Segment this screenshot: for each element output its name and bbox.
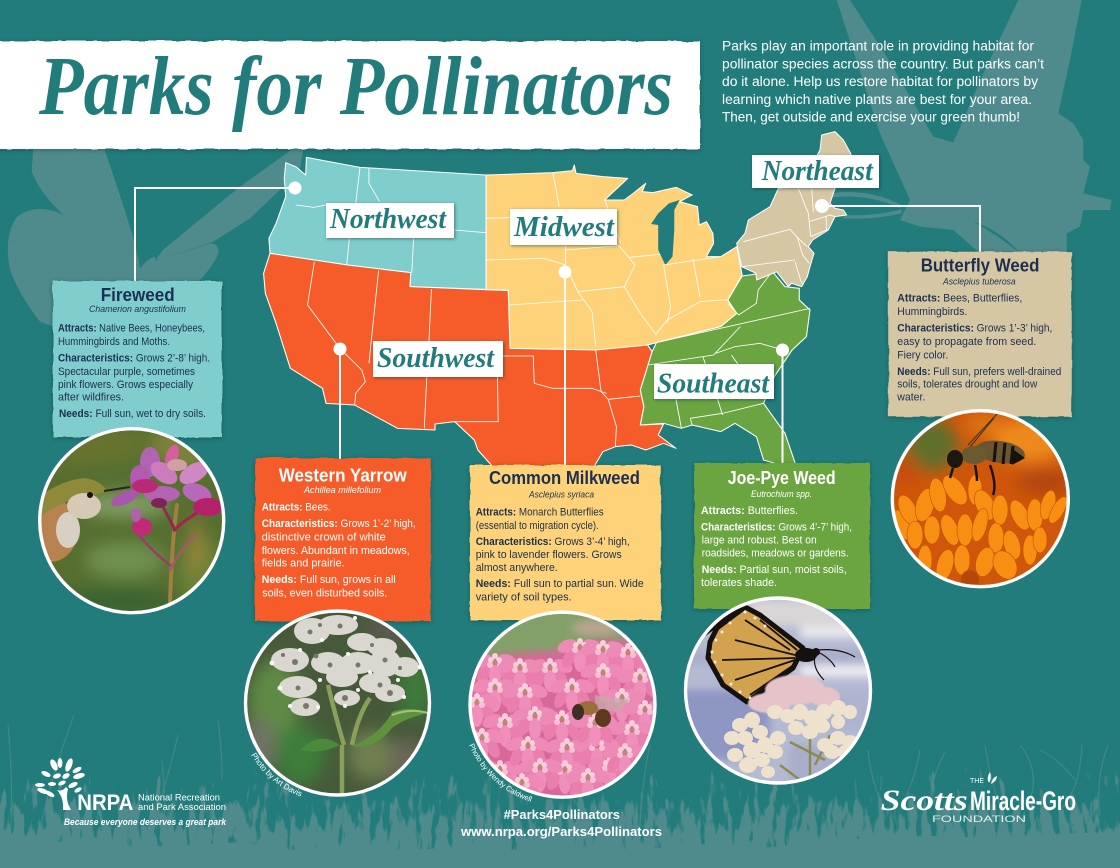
card: Fireweed: pink flowers. Grows especially bbox=[58, 379, 193, 391]
campaign hashtag and url bbox=[460, 807, 662, 839]
card: Fireweed: Attracts: Native Bees, Honeybees, bbox=[58, 323, 205, 335]
NRPA logo: National Recreation bbox=[138, 793, 220, 803]
card: Butterfly Weed: Butterfly Weed bbox=[921, 256, 1039, 276]
card: Common Milkweed: variety of soil types. bbox=[476, 592, 572, 604]
region: Southeast bbox=[640, 272, 810, 470]
campaign hashtag and url: #Parks4Pollinators bbox=[504, 807, 620, 822]
card: Western Yarrow: soils, even disturbed soils. bbox=[262, 588, 387, 600]
connector lines and map pins bbox=[135, 182, 980, 466]
map of the United States by region bbox=[264, 132, 852, 470]
card: Fireweed: Hummingbirds and Moths. bbox=[58, 336, 170, 348]
card: Joe-Pye Weed: Needs: Partial sun, moist soils, bbox=[702, 564, 847, 576]
intro text: learning which native plants are best for your area. bbox=[722, 92, 1032, 107]
card: Fireweed: after wildfires. bbox=[58, 392, 124, 404]
intro text: Parks play an important role in providing habitat for bbox=[722, 39, 1035, 54]
photo: hummingbird at fireweed bbox=[38, 427, 226, 614]
title banner: Parks for Pollinators bbox=[38, 40, 673, 133]
card: Joe-Pye Weed bbox=[694, 463, 870, 609]
card: Butterfly Weed: Asclepius tuberosa bbox=[942, 276, 1016, 286]
card: Butterfly Weed: Attracts: Bees, Butterflies, bbox=[897, 293, 1022, 305]
card: Butterfly Weed: Fiery color. bbox=[897, 349, 948, 361]
card: Joe-Pye Weed: large and robust. Best on bbox=[702, 535, 817, 547]
photo: milkweed with bee bbox=[468, 610, 657, 799]
label: Northwest: Northwest bbox=[329, 203, 447, 235]
Scotts Miracle-Gro Foundation logo bbox=[881, 772, 1076, 825]
card: Butterfly Weed: Characteristics: Grows 1’-3’ high, bbox=[897, 323, 1052, 335]
NRPA logo: Because everyone deserves a great park bbox=[64, 817, 227, 827]
label: Southwest: Southwest bbox=[377, 342, 495, 374]
card: Common Milkweed bbox=[470, 465, 661, 620]
card: Western Yarrow bbox=[255, 458, 431, 621]
Scotts Miracle-Gro Foundation logo: Scotts bbox=[881, 784, 968, 817]
card: Common Milkweed: Common Milkweed bbox=[489, 468, 640, 488]
card: Joe-Pye Weed: Attracts: Butterflies. bbox=[701, 505, 798, 517]
card: Butterfly Weed: Needs: Full sun, prefers well-drained bbox=[897, 366, 1061, 378]
photo credit: Art Davis: Photo by Art Davis bbox=[251, 752, 302, 796]
card: Common Milkweed: Characteristics: Grows 3’-4’ high, bbox=[476, 536, 630, 548]
Scotts Miracle-Gro Foundation logo: FOUNDATION bbox=[932, 814, 1026, 825]
intro text: do it alone. Help us restore habitat for pollinators by bbox=[722, 74, 1038, 89]
campaign hashtag and url: www.nrpa.org/Parks4Pollinators bbox=[460, 824, 662, 839]
card: Common Milkweed: pink to lavender flowers. Grows bbox=[476, 549, 622, 561]
region: Southwest bbox=[264, 253, 676, 470]
label: Midwest: Midwest bbox=[513, 211, 615, 243]
region: Northeast bbox=[737, 132, 852, 287]
card: Western Yarrow: Achillea millefolium bbox=[303, 485, 382, 495]
card: Fireweed: Fireweed bbox=[101, 285, 175, 305]
region: Northwest bbox=[269, 157, 486, 289]
intro text bbox=[722, 39, 1044, 125]
card: Joe-Pye Weed: Joe-Pye Weed bbox=[728, 468, 836, 488]
Scotts Miracle-Gro Foundation logo: Miracle-Gro bbox=[970, 786, 1076, 816]
card: Fireweed: Needs: Full sun, wet to dry soils. bbox=[59, 408, 206, 420]
card: Fireweed: Spectacular purple, sometimes bbox=[58, 366, 195, 378]
NRPA logo bbox=[35, 757, 227, 827]
card: Common Milkweed: almost anywhere. bbox=[476, 562, 558, 574]
card: Western Yarrow: Western Yarrow bbox=[279, 466, 408, 486]
card: Fireweed: Characteristics: Grows 2’-8’ high. bbox=[58, 353, 210, 365]
photo: monarch butterfly on joe-pye weed bbox=[680, 595, 880, 790]
background butterfly silhouette right bbox=[830, 0, 1112, 253]
card: Butterfly Weed: Hummingbirds. bbox=[897, 306, 967, 318]
card: Common Milkweed: Asclepius syriaca bbox=[528, 490, 594, 500]
card: Western Yarrow: Characteristics: Grows 1’-2’ high, bbox=[262, 518, 416, 530]
intro text: pollinator species across the country. But parks can’t bbox=[722, 56, 1044, 71]
card: Western Yarrow: distinctive crown of white bbox=[262, 532, 386, 544]
photo: western yarrow bbox=[240, 605, 435, 800]
card: Joe-Pye Weed: Characteristics: Grows 4’-7’ high, bbox=[701, 522, 852, 534]
region: Midwest bbox=[486, 165, 742, 350]
label: Southeast: Southeast bbox=[657, 368, 770, 400]
label: Northeast: Northeast bbox=[761, 156, 874, 187]
card: Common Milkweed: Attracts: Monarch Butterflies bbox=[476, 507, 604, 519]
card: Western Yarrow: fields and prairie. bbox=[262, 558, 345, 570]
state lines bbox=[296, 167, 810, 447]
card: Butterfly Weed: easy to propagate from seed. bbox=[897, 336, 1036, 348]
card: Common Milkweed: (essential to migration cycle). bbox=[476, 520, 599, 532]
card: Fireweed bbox=[53, 281, 222, 437]
card: Butterfly Weed bbox=[888, 252, 1072, 417]
card: Common Milkweed: Needs: Full sun to partial sun. Wide bbox=[476, 578, 644, 590]
background hummingbird silhouette left bbox=[8, 147, 303, 327]
photo: bee on butterfly weed bbox=[888, 405, 1073, 595]
NRPA logo: NRPA bbox=[77, 790, 133, 815]
NRPA logo: and Park Association bbox=[138, 802, 226, 812]
card: Western Yarrow: Needs: Full sun, grows in all bbox=[262, 574, 396, 586]
card: Western Yarrow: Attracts: Bees. bbox=[262, 502, 331, 514]
card: Joe-Pye Weed: Eutrochium spp. bbox=[751, 489, 812, 499]
card: Joe-Pye Weed: tolerates shade. bbox=[701, 577, 777, 589]
photo credit: Wendy Caldwell: Photo by Wendy Caldwell bbox=[469, 743, 532, 802]
lake Michigan bbox=[651, 200, 680, 265]
background grasses bbox=[0, 715, 1120, 868]
card: Western Yarrow: flowers. Abundant in meadows, bbox=[262, 545, 410, 557]
intro text: Then, get outside and exercise your green thumb! bbox=[722, 110, 1020, 125]
card: Fireweed: Chamerion angustifolium bbox=[89, 304, 186, 314]
card: Joe-Pye Weed: roadsides, meadows or gardens. bbox=[702, 548, 849, 560]
Scotts Miracle-Gro Foundation logo: THE bbox=[970, 776, 984, 785]
card: Butterfly Weed: soils, tolerates drought and low bbox=[897, 379, 1037, 391]
card: Butterfly Weed: water. bbox=[896, 392, 925, 404]
